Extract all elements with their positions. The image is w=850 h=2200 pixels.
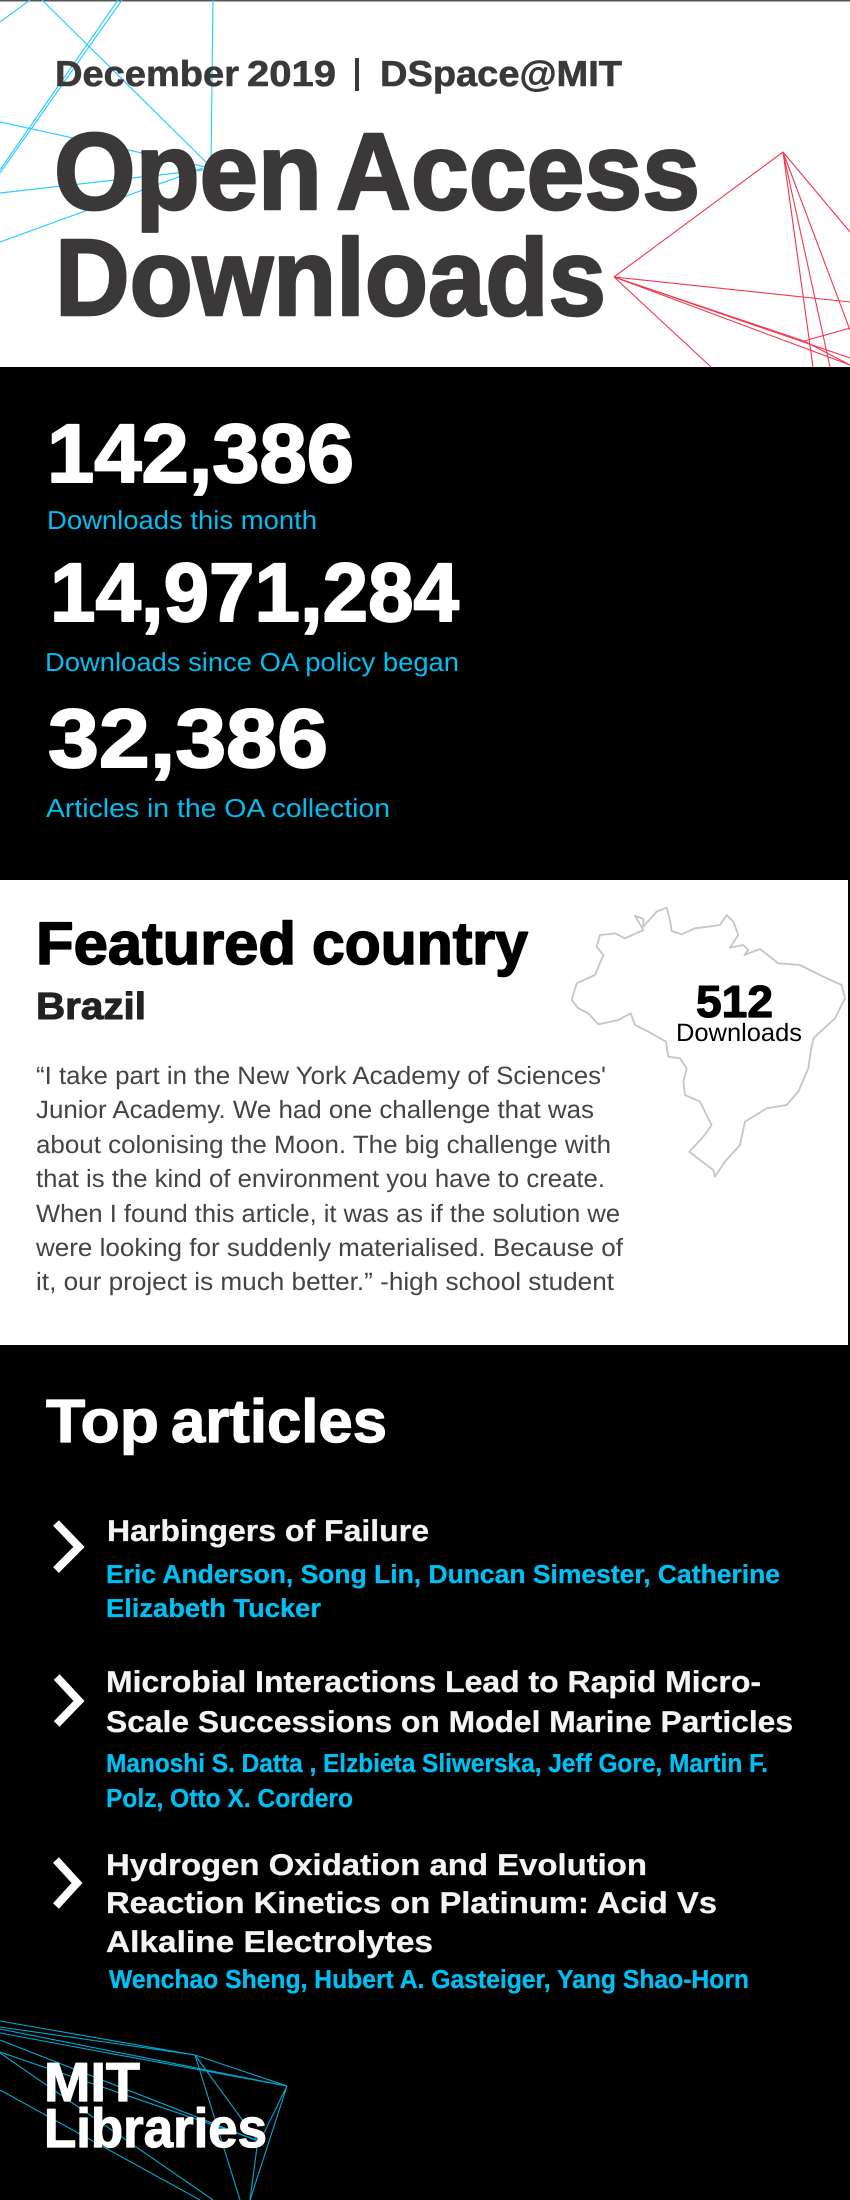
subheading: Brazil: Brazil	[36, 986, 146, 1028]
icon: chevron	[56, 1860, 77, 1906]
quote text: about colonising the Moon. The big challenge with	[36, 1131, 611, 1159]
title: Open	[54, 111, 322, 233]
icon: chevron	[57, 1677, 79, 1724]
article title: Hydrogen Oxidation and Evolution	[106, 1849, 647, 1882]
logo: MIT Libraries	[44, 2051, 267, 2159]
quote text: it, our project is much better.” -high school student	[36, 1268, 614, 1296]
heading: top articles: Top	[46, 1387, 159, 1455]
heading: featured country	[36, 910, 529, 977]
article 2	[57, 1666, 793, 1813]
article authors	[106, 1748, 768, 1813]
panel: download statistics	[45, 407, 459, 823]
footer	[0, 2021, 287, 2200]
heading: top articles	[46, 1387, 387, 1455]
article authors	[106, 1559, 780, 1623]
title: Downloads	[55, 217, 606, 339]
article title	[106, 1849, 717, 1959]
logo: MIT Libraries: Libraries	[44, 2097, 267, 2159]
stat: downloads this month: Downloads this month	[47, 505, 317, 535]
stat: articles in the collection: 32,386	[48, 692, 328, 785]
quote text: When I found this article, it was as if the solution we	[36, 1200, 620, 1228]
quote text: “I take part in the New York Academy of Sciences'	[36, 1062, 606, 1090]
callout: 512 downloads: Downloads	[676, 1019, 802, 1047]
article title: Scale Successions on Model Marine Particles	[106, 1706, 793, 1739]
heading: featured country: Featured	[36, 910, 296, 977]
article 3	[56, 1849, 749, 1994]
decorative network: red lines	[614, 152, 850, 367]
title	[54, 111, 700, 339]
date and source line: December	[55, 53, 239, 94]
date and source line	[55, 53, 622, 94]
callout: 512 downloads: 512	[696, 976, 773, 1027]
date and source line: 2019	[247, 53, 336, 94]
article authors: Eric Anderson, Song Lin, Duncan Simester, Catherine	[106, 1559, 780, 1589]
logo: MIT Libraries: MIT	[44, 2051, 140, 2113]
article authors: Elizabeth Tucker	[106, 1593, 321, 1623]
decorative network: footer lines	[0, 2021, 287, 2200]
article authors: Polz, Otto X. Cordero	[106, 1783, 353, 1813]
stat: downloads since OA policy: 14,971,284	[50, 546, 459, 639]
stat: downloads since OA policy	[45, 546, 459, 677]
panel: featured country	[0, 880, 848, 1345]
article authors: Manoshi S. Datta , Elzbieta Sliwerska, Jeff Gore, Martin F.	[106, 1748, 768, 1778]
icon: chevron	[56, 1523, 79, 1570]
decorative network: blue lines	[0, 0, 213, 242]
panel: top articles	[46, 1387, 793, 1994]
stat: downloads since OA policy: Downloads since OA policy began	[45, 647, 459, 677]
stat: articles in the collection	[46, 692, 390, 823]
heading: top articles: articles	[171, 1387, 387, 1455]
article title	[106, 1666, 793, 1739]
stat: articles in the collection: Articles in the OA collection	[46, 793, 390, 823]
panel: header	[0, 0, 850, 367]
date and source line: DSpace@MIT	[380, 53, 622, 94]
stat: downloads this month: 142,386	[47, 407, 354, 500]
article authors: Wenchao Sheng, Hubert A. Gasteiger, Yang Shao-Horn	[109, 1964, 749, 1994]
article 1	[56, 1515, 780, 1623]
article title: Microbial Interactions Lead to Rapid Micro-	[106, 1666, 761, 1699]
quote text: that is the kind of environment you have to create.	[36, 1165, 605, 1193]
quote text: Junior Academy. We had one challenge that was	[36, 1096, 594, 1124]
heading: featured country: country	[312, 910, 529, 977]
map: Brazil outline	[572, 908, 845, 1177]
quote text: were looking for suddenly materialised. Because of	[35, 1234, 623, 1262]
article title: Harbingers of Failure	[107, 1515, 429, 1548]
callout: 512 downloads	[676, 976, 802, 1047]
quote text	[35, 1062, 623, 1296]
article title: Alkaline Electrolytes	[106, 1926, 433, 1959]
article title: Reaction Kinetics on Platinum: Acid Vs	[106, 1887, 717, 1920]
title: Access	[336, 111, 700, 233]
